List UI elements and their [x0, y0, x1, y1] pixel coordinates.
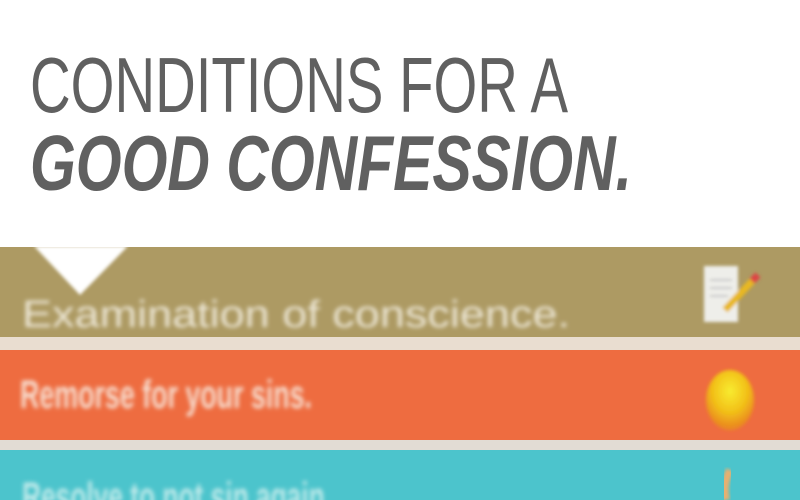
text: examination: Examination of conscience.: [22, 294, 570, 336]
icon: arm: [725, 470, 730, 500]
icon: notepad and pencil: [704, 266, 758, 322]
title: CONDITIONS FOR A: [30, 41, 568, 129]
panel: remorse: [0, 350, 800, 440]
text: remorse: Remorse for your sins.: [20, 373, 312, 417]
separator: [0, 440, 800, 450]
separator: [0, 337, 800, 350]
icon: sad face: [706, 370, 754, 430]
notch triangle: [34, 246, 128, 295]
panel: examination of conscience: [0, 246, 800, 337]
title: [30, 41, 632, 207]
panel: resolve: [0, 450, 800, 500]
